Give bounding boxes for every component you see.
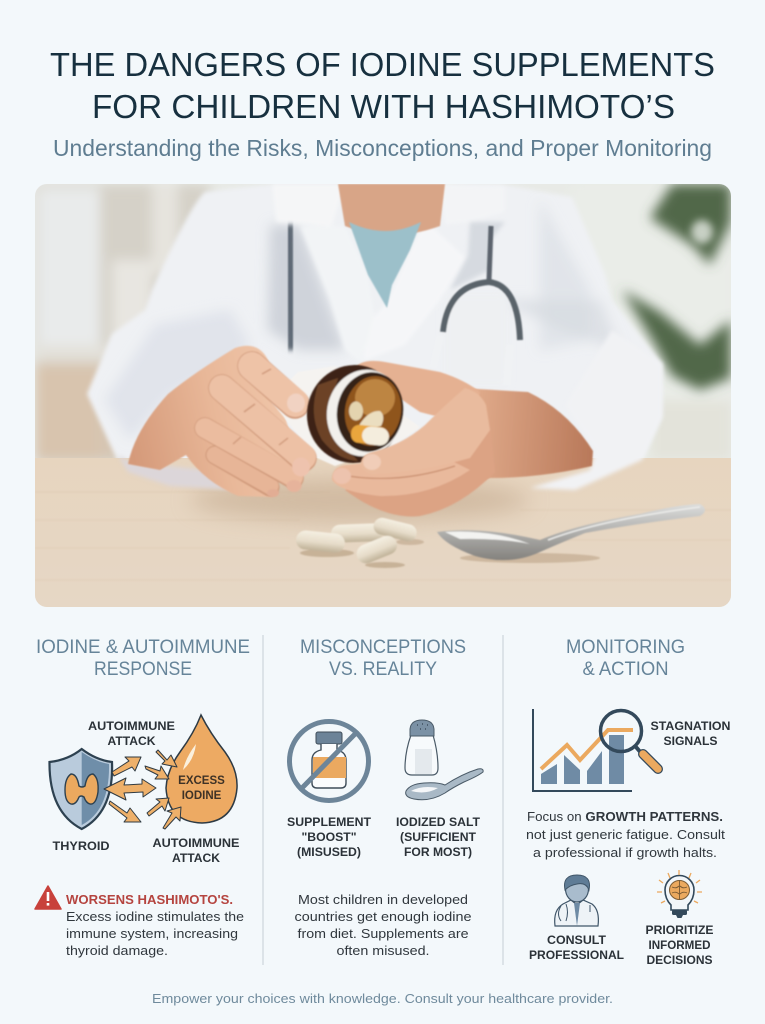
icon: light bulb with brain xyxy=(657,870,702,918)
heading xyxy=(566,637,685,680)
icon: crossed-out supplement bottle xyxy=(290,722,368,800)
label: autoimmune attack top: ATTACK xyxy=(108,736,156,748)
pill bottle xyxy=(306,364,404,464)
pill bottle label xyxy=(272,402,346,466)
spoon xyxy=(437,504,705,563)
left hand fingers xyxy=(205,366,303,487)
title: FOR CHILDREN WITH HASHIMOTO’S xyxy=(92,88,675,125)
hero photo: child in lab coat holding a pill bottle xyxy=(35,184,731,607)
label: supplement boost: SUPPLEMENT xyxy=(287,817,371,829)
label: autoimmune attack bottom: AUTOIMMUNE xyxy=(152,838,240,850)
icon: salt shaker and spoon xyxy=(405,720,483,800)
label: iodized salt xyxy=(396,817,480,859)
neck xyxy=(338,184,445,235)
title xyxy=(50,46,715,125)
label: stagnation signals xyxy=(650,721,730,748)
icon: thyroid shield xyxy=(49,749,112,829)
label: supplement boost: "BOOST" xyxy=(302,832,356,844)
body text: not just generic fatigue. Consult xyxy=(526,827,725,842)
label: consult professional xyxy=(529,935,624,962)
label: autoimmune attack bottom xyxy=(152,838,240,865)
heading: RESPONSE xyxy=(94,659,192,680)
label: autoimmune attack bottom: ATTACK xyxy=(172,853,221,865)
label: supplement boost: (MISUSED) xyxy=(297,847,361,859)
label: consult professional: PROFESSIONAL xyxy=(529,950,624,962)
table xyxy=(35,458,731,607)
body text: Most children in developed xyxy=(298,892,468,907)
body text: from diet. Supplements are xyxy=(298,926,468,941)
lab coat xyxy=(85,185,664,458)
heading: MISCONCEPTIONS xyxy=(300,637,466,658)
label: thyroid: THYROID xyxy=(52,841,110,853)
heading: VS. REALITY xyxy=(329,659,437,680)
shirt xyxy=(349,222,421,308)
heading: MONITORING xyxy=(566,637,685,658)
warning text: thyroid damage. xyxy=(66,943,168,958)
body text xyxy=(526,809,725,860)
label: autoimmune attack top: AUTOIMMUNE xyxy=(88,721,175,733)
right index finger behind bottle xyxy=(356,360,478,416)
body text: often misused. xyxy=(336,943,430,958)
panel: misconceptions vs reality xyxy=(287,637,483,958)
arrows: autoimmune attack xyxy=(104,750,181,829)
label: prioritize informed decisions: INFORMED xyxy=(648,940,710,952)
coat shading xyxy=(109,218,612,433)
left forearm and back of hand xyxy=(128,346,292,497)
icon: growth chart with magnifier xyxy=(533,709,658,791)
coat sleeves over table xyxy=(118,330,662,490)
warning text: immune system, increasing xyxy=(66,926,238,941)
blurred shelves background xyxy=(35,184,731,464)
heading: IODINE & AUTOIMMUNE xyxy=(36,637,250,658)
footer: Empower your choices with knowledge. Consult your healthcare provider. xyxy=(152,991,613,1006)
heading: & ACTION xyxy=(582,659,668,680)
panel: monitoring and action xyxy=(526,637,730,967)
label: iodized salt: (SUFFICIENT xyxy=(400,832,476,844)
label: autoimmune attack top xyxy=(88,721,175,748)
body text xyxy=(294,892,472,958)
left hand knuckles and nails xyxy=(233,369,310,497)
collar, lapels and shirt xyxy=(278,214,504,348)
warning text xyxy=(66,892,244,958)
subtitle: Understanding the Risks, Misconceptions, and Proper Monitoring xyxy=(53,135,712,161)
icon: warning triangle xyxy=(35,886,61,909)
warning text: Excess iodine stimulates the xyxy=(66,909,244,924)
panel: iodine and autoimmune response xyxy=(35,637,250,958)
label: supplement boost xyxy=(287,817,371,859)
body text: Focus on GROWTH PATTERNS. xyxy=(527,809,723,824)
warning text: WORSENS HASHIMOTO'S. xyxy=(66,892,233,907)
label: iodized salt: FOR MOST) xyxy=(404,847,472,859)
body text: countries get enough iodine xyxy=(294,909,472,924)
right hand lower fingers and thumb xyxy=(332,388,495,516)
label: prioritize informed decisions xyxy=(646,925,714,967)
capsules on table xyxy=(295,516,424,568)
label: prioritize informed decisions: PRIORITIZE xyxy=(646,925,714,937)
icon: excess iodine drop: IODINE xyxy=(182,790,222,802)
icon: excess iodine drop xyxy=(166,715,237,823)
label: stagnation signals: SIGNALS xyxy=(664,736,718,748)
body text: a professional if growth halts. xyxy=(533,845,717,860)
label: iodized salt: IODIZED SALT xyxy=(396,817,480,829)
right forearm xyxy=(474,388,594,479)
column dividers xyxy=(263,635,503,965)
label: prioritize informed decisions: DECISIONS xyxy=(646,955,713,967)
label: consult professional: CONSULT xyxy=(547,935,606,947)
icon: doctor xyxy=(555,875,598,926)
heading xyxy=(300,637,466,680)
blurred plant xyxy=(622,184,731,390)
stethoscope xyxy=(287,221,524,354)
heading xyxy=(36,637,250,680)
icon: excess iodine drop: EXCESS xyxy=(178,775,225,787)
label: stagnation signals: STAGNATION xyxy=(650,721,730,733)
title: THE DANGERS OF IODINE SUPPLEMENTS xyxy=(50,46,715,83)
shadow under hands xyxy=(190,478,530,522)
